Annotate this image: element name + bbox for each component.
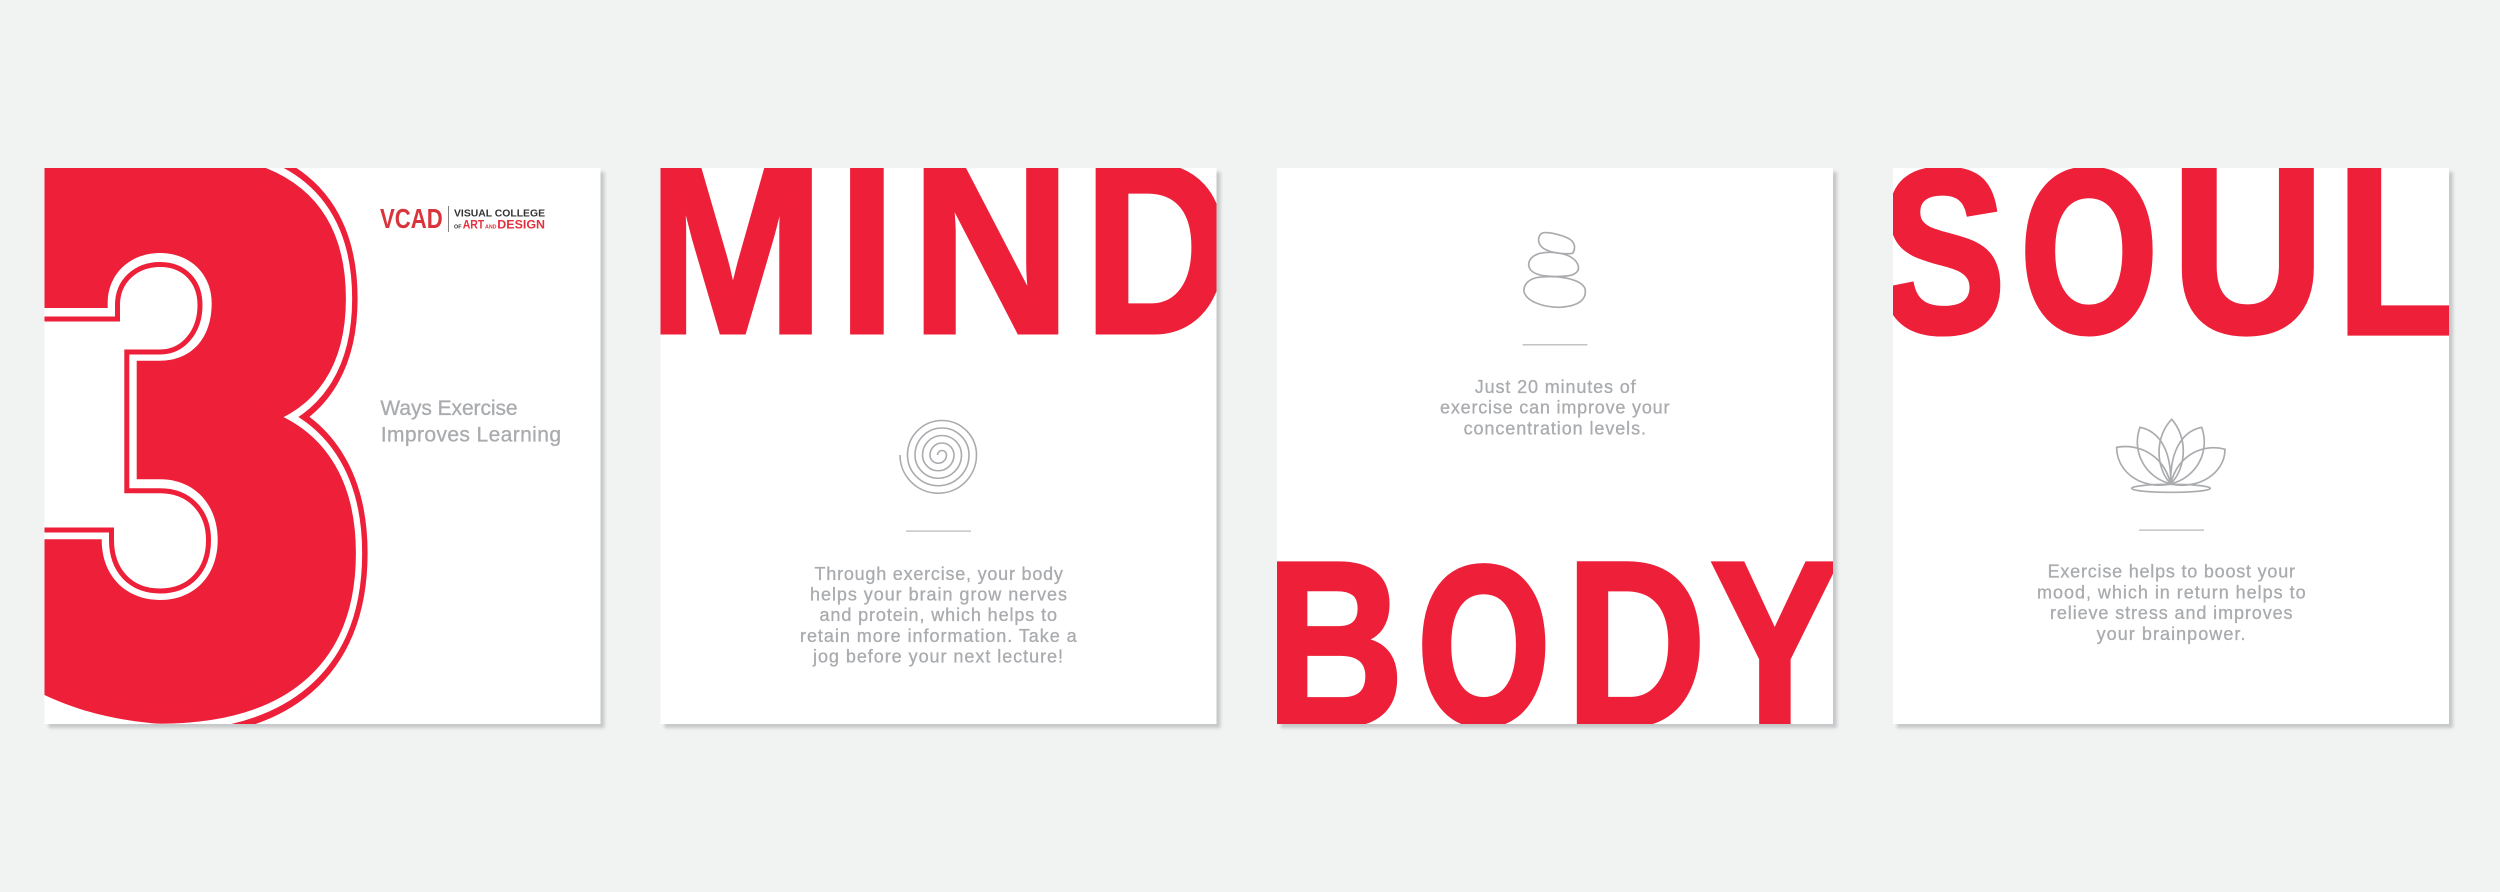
logo: VCAD: ART xyxy=(463,217,485,231)
heading: ways exercise improves learning xyxy=(380,397,561,446)
heading: SOUL: O xyxy=(2020,121,2158,381)
divider xyxy=(2139,530,2204,531)
text: body description: Just 20 minutes of xyxy=(1475,377,1637,397)
logo: VCAD: AND xyxy=(485,224,497,230)
text: mind description: retain more information. Take a xyxy=(800,626,1078,646)
text: mind description: and protein, which helps to xyxy=(820,605,1057,625)
panel: mind xyxy=(660,168,1222,730)
text: body description: concentration levels. xyxy=(1464,419,1646,439)
numeral 3 with offset outline: 3 xyxy=(0,27,395,878)
heading: MIND: M xyxy=(641,113,824,385)
heading: BODY: D xyxy=(1565,512,1706,775)
heading: BODY: O xyxy=(1417,520,1550,772)
logo: VCAD: DESIGN xyxy=(497,217,545,231)
panel: body xyxy=(1265,168,1839,775)
text: body description xyxy=(1440,377,1670,439)
logo: VCAD xyxy=(380,203,545,234)
heading: ways exercise improves learning: Improves Learning xyxy=(381,423,561,446)
text: mind description: helps your brain grow nerves xyxy=(810,585,1067,605)
icon: spiral xyxy=(900,420,976,493)
logo: VCAD: VCAD xyxy=(380,203,443,234)
text: mind description: Through exercise, your body xyxy=(814,564,1063,584)
numeral 3 with offset outline: 3 xyxy=(0,27,395,878)
text: soul description: relieve stress and improves xyxy=(2050,603,2292,623)
text: soul description: mood, which in return helps to xyxy=(2037,583,2306,603)
panel: soul xyxy=(1893,168,2454,730)
logo: VCAD: VISUAL COLLEGE xyxy=(454,209,545,220)
heading: SOUL xyxy=(1893,168,2449,337)
panel: cover with giant 3 xyxy=(44,168,606,730)
heading: MIND xyxy=(660,168,1216,334)
text: soul description: Exercise helps to boost your xyxy=(2048,562,2295,582)
heading: BODY xyxy=(1277,561,1833,724)
icon: stacked stones xyxy=(1524,233,1585,307)
text: soul description: your brainpower. xyxy=(2097,624,2246,644)
icon: lotus xyxy=(2117,419,2225,492)
text: body description: exercise can improve your xyxy=(1440,398,1670,418)
heading: SOUL: U xyxy=(2171,114,2325,384)
heading: ways exercise improves learning: Ways Exercise xyxy=(380,397,518,420)
heading: SOUL: S xyxy=(1880,121,2005,381)
text: mind description xyxy=(800,564,1078,667)
heading: MIND: D xyxy=(1084,111,1231,385)
logo: VCAD: OF xyxy=(454,224,462,230)
numeral 3 with offset outline: 3 xyxy=(0,27,395,878)
divider xyxy=(1522,344,1588,345)
heading: BODY: B xyxy=(1265,514,1404,775)
numeral 3 with offset outline xyxy=(44,168,368,724)
text: soul description xyxy=(2037,562,2306,644)
heading: SOUL: L xyxy=(2334,112,2466,387)
heading: BODY: Y xyxy=(1711,515,1839,775)
divider xyxy=(906,530,971,532)
text: mind description: jog before your next lecture! xyxy=(812,647,1063,667)
heading: MIND: N xyxy=(910,111,1072,385)
heading: MIND: I xyxy=(834,109,899,388)
